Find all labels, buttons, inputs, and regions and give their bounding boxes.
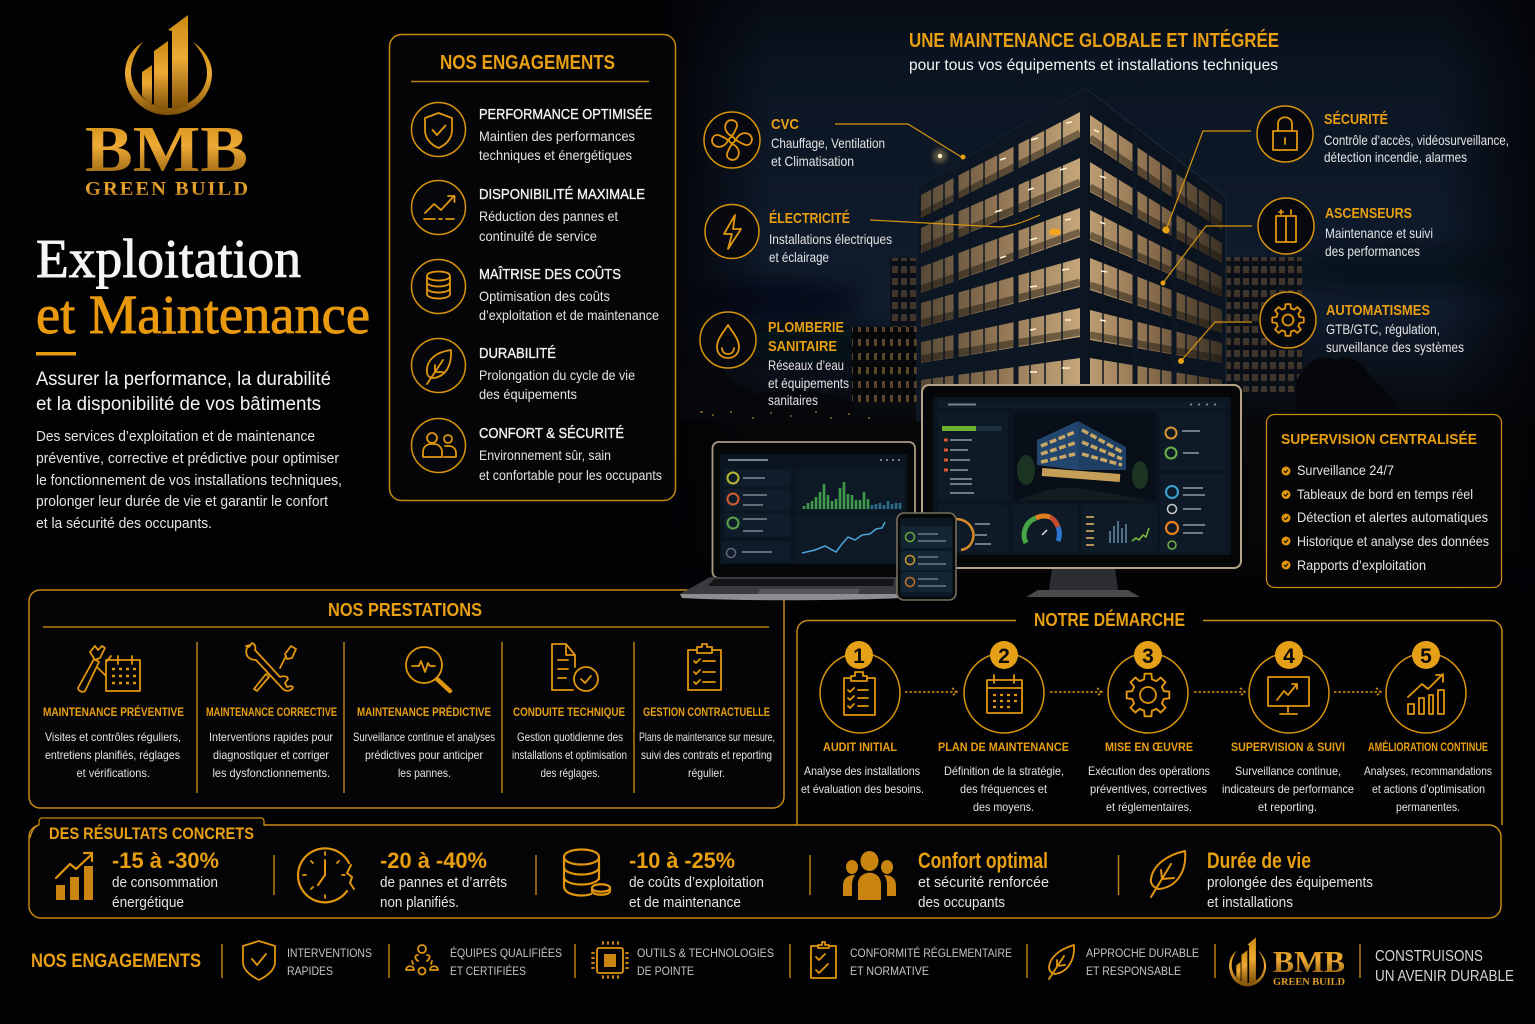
result: consommation [56, 848, 219, 911]
service: gestion contractuelle: GESTION CONTRACTUELLE [643, 705, 770, 719]
callout: CVC [704, 112, 966, 169]
step 3: mise en oeuvre: et réglementaires. [1106, 800, 1192, 814]
service: maintenance prédictive [353, 647, 495, 780]
service: maintenance corrective: diagnostiquer et corriger [213, 748, 329, 762]
engagement: équipes qualifiées: ET CERTIFIÉES [450, 963, 526, 978]
checklist: Tableaux de bord en temps réel [1297, 486, 1473, 502]
subtitle [36, 369, 331, 415]
step 5: amélioration continue [1364, 641, 1492, 814]
item: maîtrise des coûts: d’exploitation et de maintenance [479, 307, 659, 323]
monitor building view [1013, 413, 1156, 500]
service: gestion contractuelle [639, 644, 775, 780]
callout: plomberie sanitaire: SANITAIRE [768, 338, 837, 355]
step 1: audit initial: 1 [853, 645, 865, 668]
service: maintenance corrective: MAINTENANCE CORRECTIVE [206, 705, 337, 719]
callout: ascenseurs: des performances [1325, 243, 1420, 259]
logo wordmark: BMB [85, 113, 248, 186]
callout: sécurité: SÉCURITÉ [1324, 111, 1388, 128]
result: durée de vie [1151, 848, 1373, 911]
step 1: audit initial: AUDIT INITIAL [823, 740, 897, 754]
callout: automatismes [1178, 292, 1464, 364]
engagement: interventions rapides [243, 941, 372, 980]
step 4: supervision et suivi: et reporting. [1258, 800, 1317, 814]
panel: supervision centralisée: SUPERVISION CENTRALISÉE [1281, 431, 1477, 448]
item: disponibilité maximale: DISPONIBILITÉ MAXIMALE [479, 186, 645, 203]
item: disponibilité maximale: Réduction des pannes et [479, 208, 618, 224]
footer logo: GREEN BUILD [1273, 977, 1345, 988]
callout: CVC: CVC [771, 116, 799, 133]
title accent bar [36, 352, 76, 356]
callout: ascenseurs [1160, 198, 1433, 286]
engagement: approche durable: ET RESPONSABLE [1086, 964, 1181, 978]
step 5: amélioration continue: et actions d’optimisation [1372, 782, 1485, 796]
service: conduite technique [512, 644, 627, 780]
intro text: Des services d’exploitation et de maintenance [36, 428, 315, 445]
monitor left list [938, 413, 1008, 500]
heading: nos prestations: NOS PRESTATIONS [328, 600, 482, 620]
step 2: plan de maintenance: PLAN DE MAINTENANCE [938, 740, 1069, 754]
callout: CVC: et Climatisation [771, 153, 854, 169]
result: coûts: de coûts d’exploitation [629, 874, 764, 891]
step 5: amélioration continue: 5 [1420, 645, 1432, 668]
engagement: conformité: ET NORMATIVE [850, 964, 929, 978]
step 3: mise en oeuvre: 3 [1142, 645, 1154, 668]
checklist [1282, 462, 1489, 573]
engagement: outils et technologies: DE POINTE [637, 964, 694, 978]
result: coûts [564, 848, 764, 911]
result: pannes: -20 à -40% [380, 848, 487, 873]
icon: logo emblem [125, 15, 212, 115]
step 1: audit initial: et évaluation des besoins. [801, 782, 924, 796]
callout: plomberie sanitaire: sanitaires [768, 392, 818, 408]
service: gestion contractuelle: suivi des contrats et reporting [641, 748, 772, 762]
intro text: le fonctionnement de vos installations techniques, [36, 472, 342, 489]
arrow [1194, 688, 1245, 696]
callout: sécurité: détection incendie, alarmes [1324, 149, 1467, 165]
step 3: mise en oeuvre [1088, 641, 1210, 814]
monitor [922, 385, 1241, 597]
step 2: plan de maintenance: des fréquences et [960, 782, 1048, 796]
callout: automatismes: surveillance des systèmes [1326, 339, 1464, 355]
item: confort et sécurité: Environnement sûr, sain [479, 447, 611, 463]
left face windows [921, 112, 1080, 395]
service: maintenance corrective: Interventions rapides pour [209, 730, 333, 744]
item: disponibilité maximale [412, 180, 645, 244]
step 2: plan de maintenance: 2 [998, 645, 1010, 668]
step 1: audit initial [801, 641, 924, 796]
footer: nos engagements [31, 937, 1514, 988]
footer slogan: CONSTRUISONS [1375, 948, 1483, 965]
arrow [905, 688, 957, 696]
panel: des résultats concrets [29, 818, 1501, 918]
title: Exploitation [36, 228, 301, 289]
service: conduite technique: installations et optimisation [512, 748, 627, 762]
arrow [1334, 688, 1381, 696]
result: confort: Confort optimal [918, 848, 1048, 873]
step 3: mise en oeuvre: MISE EN ŒUVRE [1105, 740, 1193, 754]
checklist: Surveillance 24/7 [1297, 462, 1394, 478]
panel: supervision centralisée [1266, 414, 1502, 588]
intro text: préventive, corrective et prédictive pour optimiser [36, 450, 339, 467]
step 4: supervision et suivi: Surveillance continue, [1235, 764, 1341, 778]
service: maintenance corrective [206, 643, 337, 780]
side buildings [890, 258, 918, 388]
window interior shadow [921, 133, 1222, 359]
item: confort et sécurité: CONFORT & SÉCURITÉ [479, 425, 624, 442]
item: performance optimisée: techniques et énergétiques [479, 147, 632, 163]
step 2: plan de maintenance [938, 641, 1069, 814]
callout: automatismes: GTB/GTC, régulation, [1326, 321, 1440, 337]
footer logo: BMB [1273, 944, 1345, 979]
engagement: outils et technologies: OUTILS & TECHNOLOGIES [637, 946, 774, 960]
step 4: supervision et suivi [1222, 641, 1354, 814]
item: durabilité [412, 338, 635, 402]
engagement: approche durable [1049, 945, 1199, 979]
step 4: supervision et suivi: 4 [1283, 645, 1295, 668]
footer logo [1229, 937, 1345, 988]
step 1: audit initial: Analyse des installations [804, 764, 920, 778]
footer slogan [1375, 948, 1514, 985]
step 4: supervision et suivi: SUPERVISION & SUIVI [1231, 740, 1345, 754]
callout: électricité: Installations électriques [769, 231, 892, 247]
engagement: interventions rapides: INTERVENTIONS [287, 946, 372, 960]
item: confort et sécurité [412, 418, 662, 483]
engagement: équipes qualifiées [406, 945, 562, 978]
result: confort [843, 848, 1049, 911]
footer heading: NOS ENGAGEMENTS [31, 951, 201, 972]
result: consommation: de consommation [112, 874, 218, 891]
intro text [36, 428, 342, 532]
service: conduite technique: Gestion quotidienne des [517, 730, 623, 744]
result: consommation: -15 à -30% [112, 848, 219, 873]
callout: CVC: Chauffage, Ventilation [771, 135, 885, 151]
mullions [931, 88, 1211, 384]
step 5: amélioration continue: permanentes. [1396, 800, 1460, 814]
step 5: amélioration continue: Analyses, recommandations [1364, 764, 1492, 778]
engagement: approche durable: APPROCHE DURABLE [1086, 946, 1199, 960]
title [36, 228, 370, 345]
result: pannes: non planifiés. [380, 894, 459, 911]
service: maintenance prédictive: MAINTENANCE PRÉDICTIVE [357, 704, 491, 719]
heading: une maintenance globale: pour tous vos équipements et installations techniques [909, 57, 1278, 74]
step 5: amélioration continue: AMÉLIORATION CONTINUE [1368, 739, 1488, 754]
service: maintenance préventive: entretiens planifiés, réglages [45, 748, 180, 762]
heading: des résultats concrets: DES RÉSULTATS CONCRETS [49, 824, 254, 843]
result: confort: des occupants [918, 894, 1005, 911]
step 3: mise en oeuvre: Exécution des opérations [1088, 764, 1210, 778]
result: confort: et sécurité renforcée [918, 874, 1049, 891]
distant trees [1296, 357, 1400, 420]
item: maîtrise des coûts [412, 260, 659, 323]
result: durée de vie: prolongée des équipements [1207, 874, 1373, 891]
service: maintenance prédictive: Surveillance continue et analyses [353, 730, 495, 744]
service: maintenance préventive: Visites et contrôles réguliers, [45, 730, 181, 744]
callout: plomberie sanitaire: Réseaux d’eau [768, 357, 844, 373]
subtitle: et la disponibilité de vos bâtiments [36, 394, 321, 415]
service: maintenance préventive: MAINTENANCE PRÉVENTIVE [43, 704, 184, 719]
engagement: conformité: CONFORMITÉ RÉGLEMENTAIRE [850, 945, 1012, 960]
item: maîtrise des coûts: Optimisation des coûts [479, 288, 610, 304]
item: confort et sécurité: et confortable pour les occupants [479, 467, 662, 483]
callout: plomberie sanitaire: et équipements [768, 375, 849, 391]
callout: plomberie sanitaire [700, 312, 849, 408]
result: pannes [298, 848, 507, 911]
engagement: outils et technologies [592, 942, 774, 978]
item: durabilité: des équipements [479, 386, 577, 402]
laptop [680, 442, 915, 600]
item: performance optimisée: PERFORMANCE OPTIMISÉE [479, 106, 652, 123]
callout: électricité: ÉLECTRICITÉ [769, 210, 850, 227]
heading: une maintenance globale [909, 29, 1279, 74]
callout: électricité: et éclairage [769, 249, 829, 265]
service: gestion contractuelle: Plans de maintenance sur mesure, [639, 730, 775, 744]
result: consommation: énergétique [112, 894, 184, 911]
result: pannes: de pannes et d’arrêts [380, 874, 507, 891]
photo: night building scene [682, 0, 1535, 420]
result: durée de vie: Durée de vie [1207, 848, 1311, 873]
item: performance optimisée: Maintien des performances [479, 128, 635, 144]
engagement: interventions rapides: RAPIDES [287, 964, 333, 978]
service: maintenance préventive [43, 646, 184, 780]
callout: automatismes: AUTOMATISMES [1326, 302, 1430, 319]
subtitle: Assurer la performance, la durabilité [36, 369, 331, 390]
main building body [917, 88, 1226, 420]
service: maintenance corrective: les dysfonctionnements. [212, 766, 330, 780]
item: disponibilité maximale: continuité de service [479, 228, 597, 244]
engagement: conformité [811, 942, 1012, 978]
callout: sécurité [1162, 106, 1509, 234]
monitor right cards [1160, 413, 1226, 470]
checklist: Détection et alertes automatiques [1297, 509, 1488, 525]
item: maîtrise des coûts: MAÎTRISE DES COÛTS [479, 266, 621, 283]
step 2: plan de maintenance: des moyens. [973, 800, 1034, 814]
callout: électricité [705, 204, 1040, 265]
checklist: Rapports d’exploitation [1297, 557, 1426, 573]
step 3: mise en oeuvre: préventives, correctives [1090, 782, 1207, 796]
heading: nos engagements: NOS ENGAGEMENTS [440, 52, 615, 74]
service: maintenance préventive: et vérifications. [76, 766, 150, 780]
checklist: Historique et analyse des données [1297, 533, 1489, 549]
service: maintenance prédictive: les pannes. [398, 766, 451, 780]
callout: ascenseurs: ASCENSEURS [1325, 205, 1412, 222]
item: durabilité: Prolongation du cycle de vie [479, 367, 635, 383]
right face windows [1090, 115, 1222, 395]
result: durée de vie: et installations [1207, 894, 1293, 911]
callout: plomberie sanitaire: PLOMBERIE [768, 319, 844, 336]
logo tagline: GREEN BUILD [85, 178, 248, 200]
heading: une maintenance globale: UNE MAINTENANCE GLOBALE ET INTÉGRÉE [909, 29, 1279, 52]
service: gestion contractuelle: régulier. [688, 766, 725, 780]
panel: nos engagements [390, 34, 676, 500]
panel: nos prestations [29, 590, 784, 808]
item: durabilité: DURABILITÉ [479, 345, 556, 362]
step 2: plan de maintenance: Définition de la stratégie, [944, 764, 1064, 778]
service: conduite technique: des réglages. [540, 766, 600, 780]
ceiling lights [995, 122, 1107, 372]
intro text: et la sécurité des occupants. [36, 515, 212, 532]
item: performance optimisée [412, 102, 652, 163]
callout: ascenseurs: Maintenance et suivi [1325, 225, 1433, 241]
devices: supervision dashboards [680, 385, 1241, 600]
logo: BMB Green Build [85, 15, 248, 200]
result: coûts: -10 à -25% [629, 848, 735, 873]
arrow [1050, 688, 1102, 696]
title: et Maintenance [36, 284, 370, 345]
street lamp glow [933, 149, 947, 163]
intro text: prolonger leur durée de vie et garantir le confort [36, 493, 329, 510]
result: coûts: et de maintenance [629, 894, 741, 911]
monitor bottom panels [938, 505, 1008, 552]
service: maintenance prédictive: prédictives pour anticiper [365, 748, 483, 762]
engagement: équipes qualifiées: ÉQUIPES QUALIFIÉES [450, 945, 562, 960]
phone [897, 513, 956, 600]
panel: notre démarche [797, 609, 1502, 825]
heading: notre démarche: NOTRE DÉMARCHE [1034, 609, 1185, 630]
step 4: supervision et suivi: indicateurs de performance [1222, 782, 1354, 796]
service: conduite technique: CONDUITE TECHNIQUE [513, 705, 625, 719]
